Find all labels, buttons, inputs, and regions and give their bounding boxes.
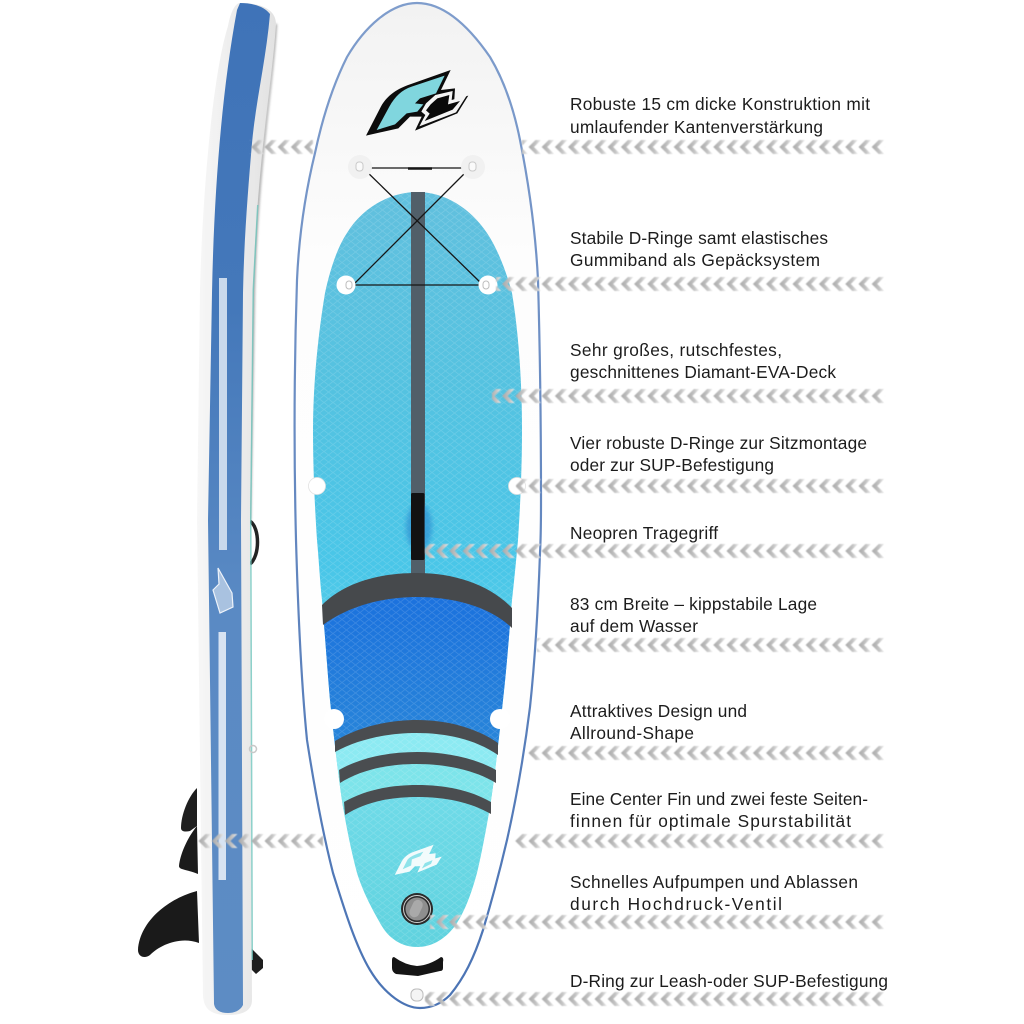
label 9: durch Hochdruck-Ventil	[570, 894, 782, 914]
dark blue deck zone	[324, 597, 510, 746]
arrow row 1	[250, 137, 885, 157]
side D-ring	[250, 746, 256, 752]
label 3: geschnittenes Diamant-EVA-Deck	[570, 362, 836, 382]
arc strap one	[335, 720, 498, 755]
side rear handle	[250, 521, 258, 564]
arc strap three	[344, 785, 491, 815]
side view of board	[138, 3, 277, 1015]
side logo	[213, 568, 233, 613]
valve	[401, 893, 433, 925]
arc strap top	[322, 573, 512, 628]
arrow row 5	[425, 541, 885, 561]
label 1	[570, 94, 870, 137]
label 3: Sehr großes, rutschfestes,	[570, 340, 782, 360]
arrow rows	[198, 137, 885, 1009]
main board top view	[295, 3, 541, 1008]
arrow row 8	[198, 831, 885, 851]
bungee cord	[353, 168, 483, 285]
neoprene handle glow	[406, 503, 432, 551]
label 9	[570, 872, 858, 914]
label 3	[570, 340, 836, 382]
label 4: Vier robuste D-Ringe zur Sitzmontage	[570, 433, 867, 453]
deck texture	[305, 185, 530, 955]
mid D-ring left	[308, 478, 326, 494]
label 7: Allround-Shape	[570, 723, 694, 743]
side stripe upper	[219, 278, 227, 550]
arrow row 7	[527, 743, 885, 763]
label 4	[570, 433, 867, 475]
side teal edge	[250, 205, 258, 960]
label 6	[570, 594, 817, 636]
label 6: 83 cm Breite – kippstabile Lage	[570, 594, 817, 614]
label 2: Stabile D-Ringe samt elastisches	[570, 228, 828, 248]
side stripe lower	[218, 632, 226, 880]
board outline	[295, 3, 541, 1008]
feature labels	[570, 94, 888, 991]
lower D-ring left	[324, 709, 344, 729]
label 7	[570, 701, 747, 743]
center fin	[138, 891, 199, 957]
arrow row 6	[537, 635, 885, 655]
arc strap two	[339, 752, 496, 783]
label 8: finnen für optimale Spurstabilität	[570, 811, 851, 831]
leash D-ring	[411, 989, 423, 1001]
label 9: Schnelles Aufpumpen und Ablassen	[570, 872, 858, 892]
label 2: Gummiband als Gepäcksystem	[570, 250, 820, 270]
tail handle	[392, 957, 443, 976]
upper side fin	[181, 788, 197, 832]
logo top	[366, 70, 468, 136]
lower light band	[338, 764, 494, 808]
label 10: D-Ring zur Leash-oder SUP-Befestigung	[570, 971, 888, 991]
neoprene carry handle	[411, 493, 424, 560]
center strap	[411, 192, 425, 576]
label 4: oder zur SUP-Befestigung	[570, 455, 774, 475]
upper D-ring right	[461, 155, 485, 179]
deck D-ring right	[478, 276, 498, 294]
arrow row 10	[425, 989, 885, 1009]
lower D-ring right	[490, 709, 510, 729]
logo tail	[395, 845, 442, 875]
deck D-ring left	[336, 276, 356, 294]
upper light band	[336, 733, 497, 776]
light blue deck pad	[305, 185, 530, 955]
side blue tube	[208, 3, 270, 1013]
label 1: umlaufender Kantenverstärkung	[570, 117, 823, 137]
label 8: Eine Center Fin und zwei feste Seiten-	[570, 789, 868, 809]
side leash handle	[250, 947, 263, 974]
label 7: Attraktives Design und	[570, 701, 747, 721]
side white rail	[197, 3, 276, 1015]
arrow row 3	[492, 386, 885, 406]
side shadow	[248, 24, 277, 520]
label 8	[570, 789, 868, 831]
label 5: Neopren Tragegriff	[570, 523, 718, 543]
arrow row 9	[430, 912, 885, 932]
mid D-ring right	[508, 478, 526, 494]
label 2	[570, 228, 828, 270]
arrow row 2	[496, 274, 885, 294]
arrow row 4	[516, 476, 885, 496]
middle side fin	[179, 826, 198, 874]
label 1: Robuste 15 cm dicke Konstruktion mit	[570, 94, 870, 114]
label 6: auf dem Wasser	[570, 616, 698, 636]
upper D-ring left	[348, 155, 372, 179]
